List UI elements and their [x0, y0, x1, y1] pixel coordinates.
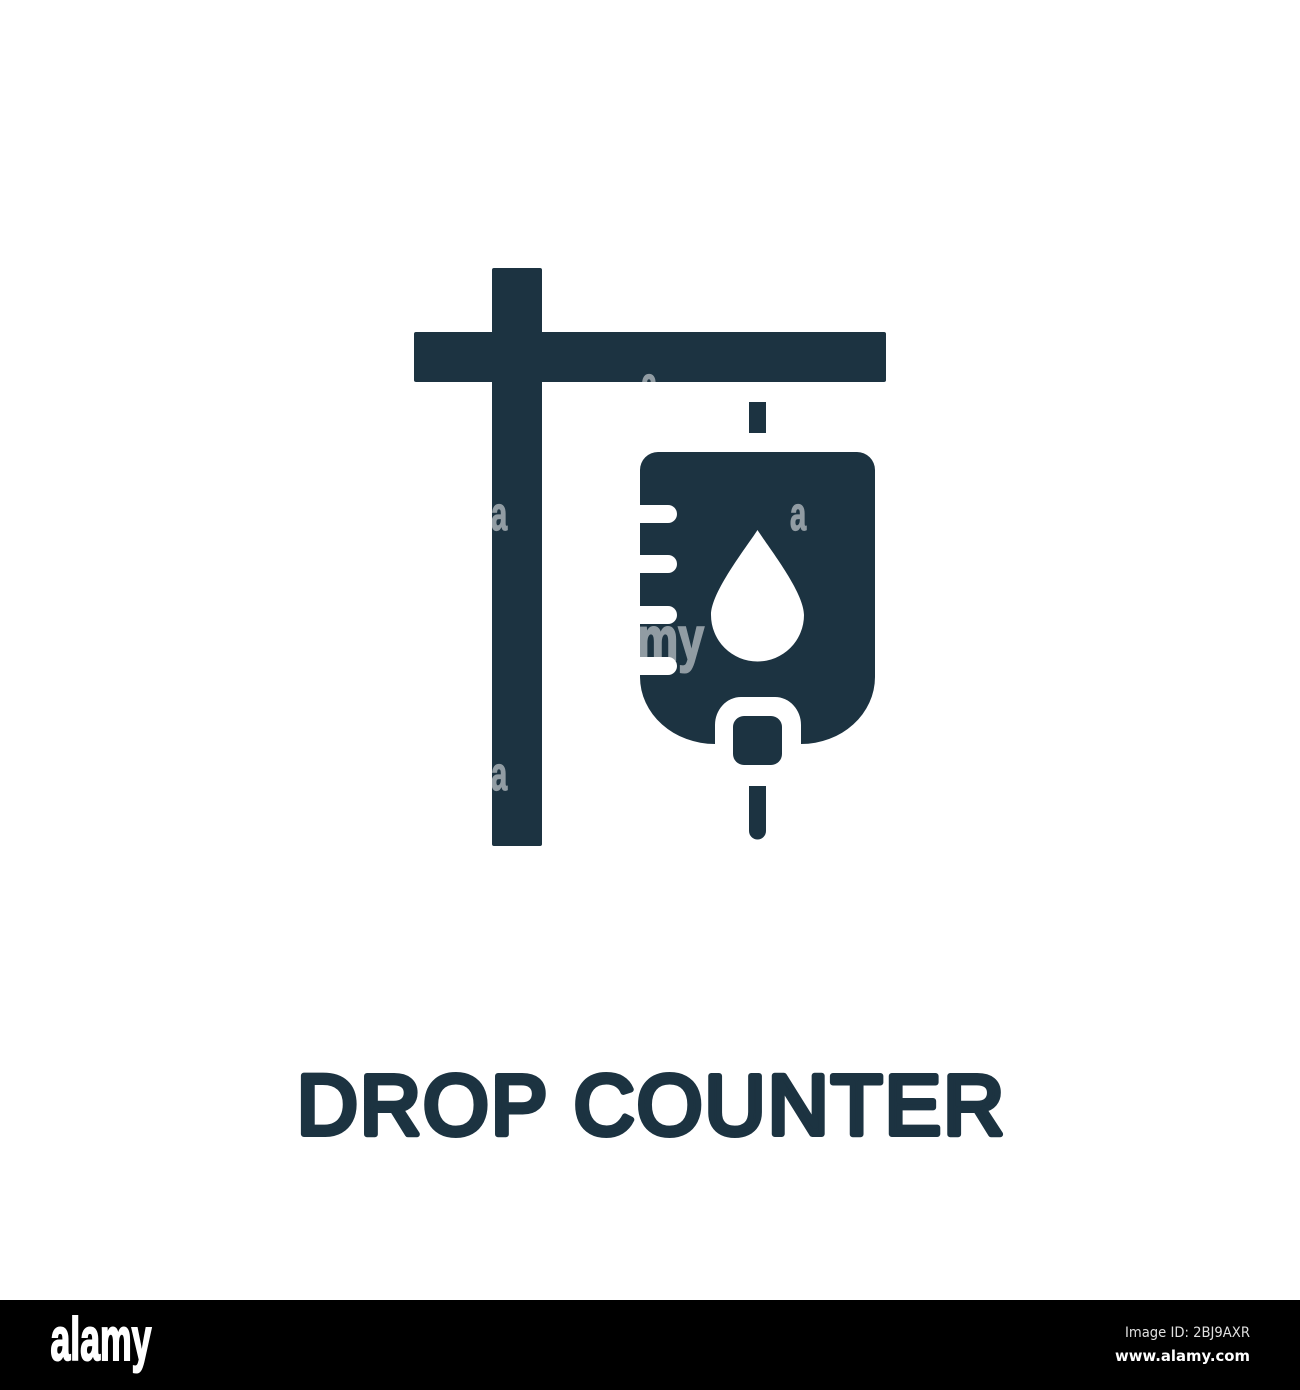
icon: drop counter IV stand and bag: [414, 268, 886, 846]
watermark fragments: a: [491, 749, 507, 801]
icon: upper connector tube: [749, 402, 766, 433]
watermark fragments: [491, 359, 806, 801]
image id: Image ID: 2BJ9AXR: [1125, 1325, 1250, 1341]
title: DROP COUNTER: [297, 1058, 1004, 1152]
icon: lower tube: [749, 786, 766, 840]
watermark fragments: a: [641, 359, 657, 411]
watermark fragments: a: [790, 489, 806, 541]
watermark fragments: my: [637, 606, 704, 674]
icon: IV bag: [640, 452, 875, 744]
icon: stand pole: [492, 268, 542, 846]
icon: drip chamber: [733, 716, 782, 765]
website: www.alamy.com: [1115, 1347, 1250, 1365]
icon: bag scale marks: [640, 505, 677, 675]
icon: water drop: [711, 530, 804, 662]
watermark fragments: a: [491, 489, 507, 541]
footer bar: [0, 1300, 1300, 1390]
footer logo: alamy: [50, 1306, 152, 1373]
icon: stand crossbar: [414, 332, 886, 382]
